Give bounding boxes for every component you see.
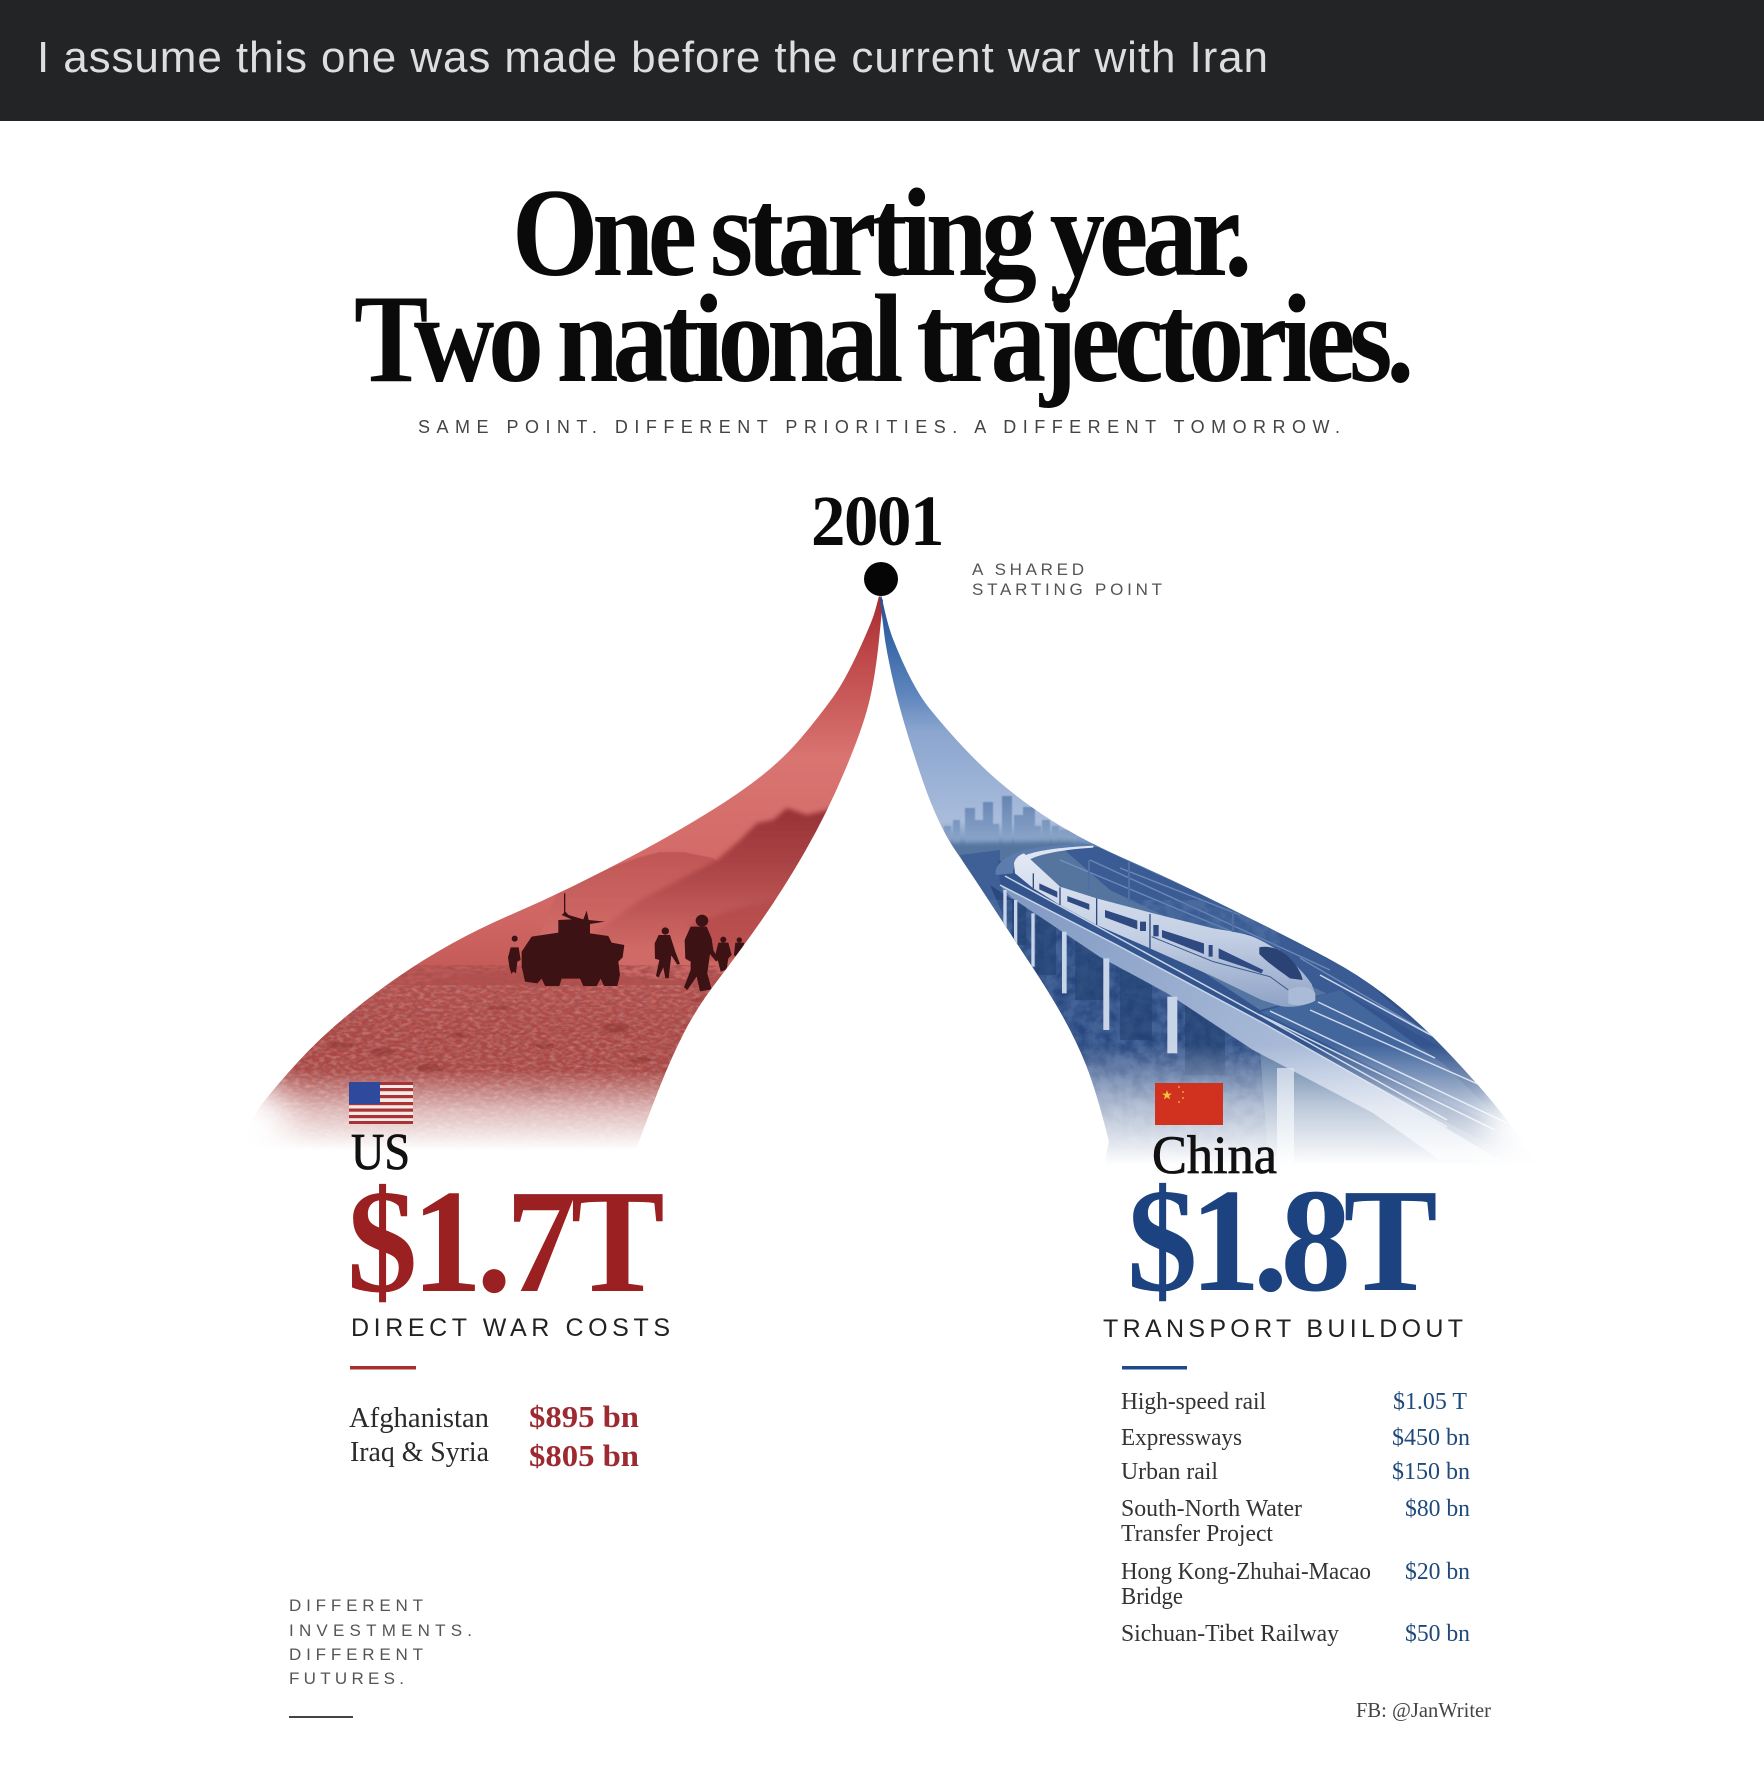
soldiers at right [715, 937, 732, 972]
country name: China: China [1152, 1125, 1277, 1185]
desert ground [264, 975, 721, 1124]
soldier behind vehicle [508, 936, 521, 974]
transport breakdown table: Sichuan-Tibet Railway [1121, 1621, 1339, 1647]
low foothill [691, 900, 775, 961]
red ribbon: US war scene [257, 596, 883, 1146]
icon: China flag [1155, 1083, 1223, 1125]
credit: FB: @JanWriter [1356, 1698, 1491, 1722]
shared starting point label: STARTING POINT [972, 580, 1162, 599]
near mountain ridge [598, 806, 828, 984]
footer tagline: INVESTMENTS. [289, 1621, 472, 1640]
viaduct pillars [1003, 890, 1177, 1053]
land below skyline [950, 838, 1380, 1097]
windows [1039, 883, 1263, 973]
viaduct side face [1000, 885, 1500, 1160]
China block [1103, 1083, 1470, 1647]
transport breakdown table: $20 bn [1405, 1559, 1470, 1585]
far mountains [520, 852, 745, 985]
war cost breakdown: $895 bn [529, 1399, 639, 1434]
skyscrapers [944, 796, 1076, 850]
car joints [1033, 873, 1150, 948]
pillar shadows [1012, 895, 1225, 1075]
transport breakdown table: $50 bn [1405, 1621, 1470, 1647]
red divider [350, 1366, 416, 1370]
shared starting point label: A SHARED [972, 560, 1084, 579]
header bar with caption [0, 0, 1764, 121]
header bar with caption: I assume this one was made before the current war with Iran [37, 33, 1268, 82]
war cost breakdown [349, 1399, 639, 1473]
transport breakdown table [1121, 1389, 1470, 1647]
transport breakdown table: Expressways [1121, 1425, 1242, 1451]
footer tagline: DIFFERENT [289, 1645, 423, 1664]
foreground trees [990, 885, 1266, 1138]
belt line [1152, 937, 1288, 990]
year 2001: 2001 [811, 481, 943, 561]
nose [1288, 987, 1315, 1005]
blue divider [1122, 1366, 1187, 1370]
title: Two national trajectories. [354, 270, 1409, 409]
label: direct war costs: DIRECT WAR COSTS [351, 1314, 670, 1342]
amount: $1.7T: $1.7T [347, 1160, 663, 1324]
start dot [864, 562, 898, 596]
shared starting point label [972, 560, 1162, 599]
windscreen [1259, 947, 1303, 980]
transport breakdown table: Hong Kong-Zhuhai-Macao [1121, 1559, 1371, 1585]
transport breakdown table: Bridge [1121, 1584, 1183, 1610]
war cost breakdown: Iraq & Syria [350, 1437, 490, 1468]
transport breakdown table: Transfer Project [1121, 1521, 1273, 1547]
blue ribbon: China rail scene [880, 596, 1508, 1160]
poles [1089, 860, 1233, 932]
transport breakdown table: High-speed rail [1121, 1389, 1266, 1415]
foreground pillar [1277, 1068, 1294, 1152]
soldier in foreground [684, 915, 719, 991]
footer tagline: DIFFERENT [289, 1596, 423, 1615]
far rail lines [1060, 860, 1440, 1040]
transport breakdown table: $1.05 T [1393, 1389, 1467, 1415]
label: transport buildout: TRANSPORT BUILDOUT [1103, 1315, 1463, 1343]
transport breakdown table: Urban rail [1121, 1459, 1218, 1485]
soldier walking left [655, 927, 680, 978]
rocks on ground [327, 998, 709, 1093]
war cost breakdown: $805 bn [529, 1438, 639, 1473]
dark upper distance band behind train [1066, 847, 1404, 1016]
transport breakdown table: $450 bn [1392, 1425, 1470, 1451]
war cost breakdown: Afghanistan [349, 1403, 489, 1434]
armoured vehicle silhouette [508, 893, 744, 991]
track bed [998, 860, 1498, 1129]
US block [347, 1082, 670, 1473]
title: One starting year. [512, 164, 1247, 303]
transport breakdown table: South-North Water [1121, 1496, 1302, 1522]
transport breakdown table: $150 bn [1392, 1459, 1470, 1485]
icon: US flag [349, 1082, 413, 1124]
transport breakdown table: $80 bn [1405, 1496, 1470, 1522]
title [354, 164, 1409, 409]
subtitle: SAME POINT. DIFFERENT PRIORITIES. A DIFFERENT TOMORROW. [418, 417, 1340, 437]
footer tagline: FUTURES. [289, 1669, 404, 1688]
amount: $1.8T: $1.8T [1127, 1159, 1436, 1323]
curved track and train [996, 844, 1315, 1007]
rails [1000, 876, 1507, 1130]
footer tagline [289, 1596, 472, 1718]
country name: US: US [351, 1124, 410, 1181]
ribbon bottom fades [180, 1045, 1595, 1210]
